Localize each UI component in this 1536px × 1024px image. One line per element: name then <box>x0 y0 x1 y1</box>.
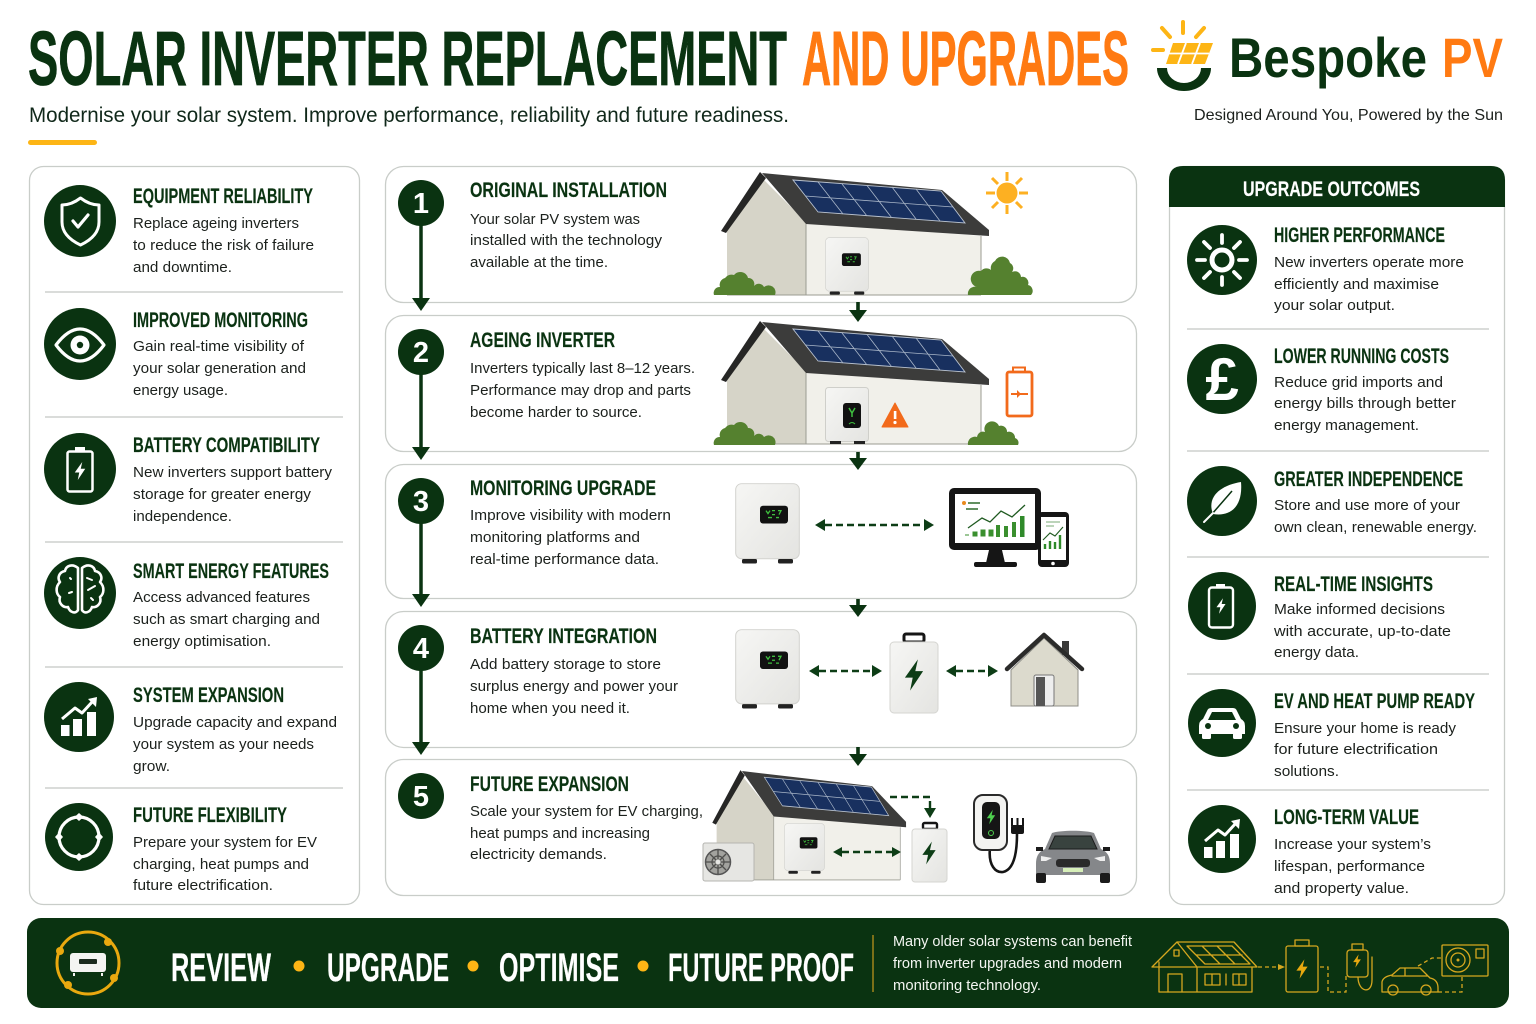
icon: sun and panel smile <box>1153 22 1213 91</box>
higher performance: New inverters operate more <box>1274 254 1464 271</box>
greater independence <box>1187 466 1477 536</box>
arrow: inverter to battery <box>833 847 901 857</box>
step 4: battery integration: BATTERY INTEGRATION <box>470 624 657 648</box>
long-term value: and property value. <box>1274 880 1409 897</box>
footer note: monitoring technology. <box>893 977 1041 994</box>
logo: Bespoke PV: Bespoke <box>1229 26 1427 89</box>
improved monitoring: energy usage. <box>133 382 228 399</box>
illustration: house with ageing inverter <box>714 321 1019 445</box>
system expansion: grow. <box>133 758 170 775</box>
icon strip: home energy system <box>1152 940 1488 995</box>
EV and heat pump ready: for future electrification <box>1274 741 1438 758</box>
step 3: monitoring upgrade: 3 <box>413 486 429 518</box>
slogan <box>171 946 854 990</box>
panel: upgrade outcomes <box>1169 166 1505 904</box>
equipment reliability: to reduce the risk of failure <box>133 237 314 254</box>
lower running costs: £ <box>1205 346 1239 413</box>
equipment reliability: Replace ageing inverters <box>133 215 299 232</box>
system expansion: Upgrade capacity and expand <box>133 714 337 731</box>
icon: degraded battery <box>1007 368 1032 416</box>
illustration: inverter <box>736 484 799 564</box>
arrow: panels to battery <box>890 797 936 818</box>
step 1: original installation: installed with the technology <box>470 232 663 249</box>
slogan: OPTIMISE <box>499 946 619 990</box>
icon: warning triangle <box>882 403 908 427</box>
step 3: monitoring upgrade: monitoring platforms and <box>470 529 640 546</box>
illustration: monitor and phone <box>949 488 1069 567</box>
step 1: original installation: 1 <box>413 188 429 220</box>
illustration: heat pump <box>703 843 754 881</box>
slogan: UPGRADE <box>327 946 449 990</box>
footer note: from inverter upgrades and modern <box>893 955 1122 972</box>
illustration: house with solar <box>712 770 906 880</box>
long-term value: Increase your system’s <box>1274 836 1431 853</box>
step 3: monitoring upgrade: Improve visibility with modern <box>470 507 671 524</box>
slogan: FUTURE PROOF <box>668 946 854 990</box>
long-term value: lifespan, performance <box>1274 858 1425 875</box>
step 2: ageing inverter: become harder to source. <box>470 404 642 421</box>
step 2: ageing inverter <box>386 316 1136 452</box>
arrow: inverter to battery <box>809 665 882 677</box>
step 5: future expansion: FUTURE EXPANSION <box>470 772 629 796</box>
footer banner <box>27 918 1509 1008</box>
step 5: future expansion: heat pumps and increasing <box>470 825 650 842</box>
step 1: original installation <box>386 166 1136 302</box>
smart energy features: Access advanced features <box>133 589 310 606</box>
step 2: ageing inverter: 2 <box>413 337 429 369</box>
system expansion <box>44 682 337 775</box>
step 3: monitoring upgrade: real-time performance data. <box>470 551 659 568</box>
footer note: Many older solar systems can benefit <box>893 933 1133 950</box>
long-term value <box>1188 805 1431 897</box>
equipment reliability <box>44 184 314 276</box>
logo: Bespoke PV: PV <box>1442 26 1503 89</box>
arrow: step 2 to step 3 <box>412 447 867 470</box>
real-time insights: REAL-TIME INSIGHTS <box>1274 572 1433 596</box>
real-time insights: energy data. <box>1274 644 1359 661</box>
equipment reliability: and downtime. <box>133 259 232 276</box>
system expansion: your system as your needs <box>133 736 314 753</box>
illustration: inverter <box>784 823 825 874</box>
arrow: battery to home <box>946 665 998 677</box>
arrow: step 1 to step 2 <box>412 298 867 322</box>
real-time insights: with accurate, up-to-date <box>1273 623 1451 640</box>
lower running costs <box>1187 344 1456 434</box>
battery compatibility: storage for greater energy <box>133 486 312 503</box>
step 5: future expansion: Scale your system for EV charging, <box>470 803 703 820</box>
step 1: original installation: ORIGINAL INSTALLATION <box>470 178 667 202</box>
greater independence: own clean, renewable energy. <box>1274 519 1477 536</box>
lower running costs: LOWER RUNNING COSTS <box>1274 344 1449 368</box>
lower running costs: energy bills through better <box>1274 395 1456 412</box>
step 4: battery integration: Add battery storage to store <box>470 656 661 673</box>
logo: Bespoke PV: Designed Around You, Powered by the Sun <box>1194 107 1503 124</box>
EV and heat pump ready: solutions. <box>1274 763 1339 780</box>
battery compatibility: independence. <box>133 508 232 525</box>
step 3: monitoring upgrade: MONITORING UPGRADE <box>470 476 656 500</box>
EV and heat pump ready <box>1188 689 1475 780</box>
step 5: future expansion <box>386 760 1136 896</box>
title: AND UPGRADES <box>802 16 1129 102</box>
arrow: two-way data link <box>815 519 934 531</box>
step 4: battery integration <box>386 612 1136 748</box>
step 2: ageing inverter: Performance may drop and parts <box>470 382 691 399</box>
step 4: battery integration: 4 <box>413 633 429 665</box>
illustration: house with solar panels <box>714 172 1033 295</box>
panel: benefits <box>30 166 360 904</box>
future flexibility: charging, heat pumps and <box>133 856 309 873</box>
illustration: house <box>1007 635 1082 706</box>
improved monitoring <box>44 308 308 399</box>
smart energy features <box>44 557 329 650</box>
panel header: UPGRADE OUTCOMES <box>1243 177 1420 201</box>
battery compatibility <box>44 433 333 525</box>
smart energy features: energy optimisation. <box>133 633 271 650</box>
higher performance <box>1187 223 1464 314</box>
lower running costs: Reduce grid imports and <box>1274 374 1443 391</box>
illustration: battery <box>912 823 947 882</box>
icon: sun <box>986 172 1028 214</box>
higher performance: HIGHER PERFORMANCE <box>1274 223 1445 247</box>
equipment reliability: EQUIPMENT RELIABILITY <box>133 184 313 208</box>
step 1: original installation: available at the time. <box>470 254 608 271</box>
step 2: ageing inverter: AGEING INVERTER <box>470 328 615 352</box>
illustration: inverter <box>736 630 799 709</box>
title: SOLAR INVERTER REPLACEMENT <box>28 16 787 102</box>
panel header <box>1169 166 1505 207</box>
improved monitoring: your solar generation and <box>133 360 306 377</box>
step 3: monitoring upgrade <box>386 464 1136 598</box>
smart energy features: such as smart charging and <box>133 611 320 628</box>
accent bar <box>28 140 97 145</box>
battery compatibility: BATTERY COMPATIBILITY <box>133 433 320 457</box>
real-time insights: Make informed decisions <box>1274 601 1445 618</box>
step 2: ageing inverter: Inverters typically last 8–12 years. <box>470 360 695 377</box>
step 4: battery integration: home when you need it. <box>470 700 630 717</box>
arrow: step 3 to step 4 <box>412 594 867 617</box>
future flexibility: future electrification. <box>133 877 273 894</box>
icon: inverter in cycle ring <box>56 932 119 994</box>
greater independence: Store and use more of your <box>1274 497 1460 514</box>
future flexibility <box>45 803 317 894</box>
step 4: battery integration: surplus energy and power your <box>470 678 678 695</box>
long-term value: LONG-TERM VALUE <box>1274 805 1419 829</box>
illustration: EV charger <box>974 795 1024 872</box>
logo: Bespoke PV <box>1153 22 1503 124</box>
real-time insights <box>1188 572 1451 661</box>
EV and heat pump ready: Ensure your home is ready <box>1274 720 1456 737</box>
lower running costs: energy management. <box>1274 417 1419 434</box>
battery compatibility: New inverters support battery <box>133 464 333 481</box>
future flexibility: FUTURE FLEXIBILITY <box>133 803 287 827</box>
step 5: future expansion: electricity demands. <box>470 846 607 863</box>
illustration: electric car <box>1036 831 1110 883</box>
step 1: original installation: Your solar PV system was <box>470 211 640 228</box>
future flexibility: Prepare your system for EV <box>133 834 317 851</box>
higher performance: efficiently and maximise <box>1274 276 1439 293</box>
subtitle: Modernise your solar system. Improve performance, reliability and future readiness. <box>29 104 789 127</box>
system expansion: SYSTEM EXPANSION <box>133 683 284 707</box>
step 5: future expansion: 5 <box>413 781 429 813</box>
slogan: REVIEW <box>171 946 271 990</box>
improved monitoring: IMPROVED MONITORING <box>133 308 308 332</box>
smart energy features: SMART ENERGY FEATURES <box>133 559 329 583</box>
arrow: step 4 to step 5 <box>412 742 867 766</box>
improved monitoring: Gain real-time visibility of <box>133 338 305 355</box>
footer note <box>893 933 1133 994</box>
higher performance: your solar output. <box>1274 297 1395 314</box>
illustration: battery <box>890 634 938 713</box>
